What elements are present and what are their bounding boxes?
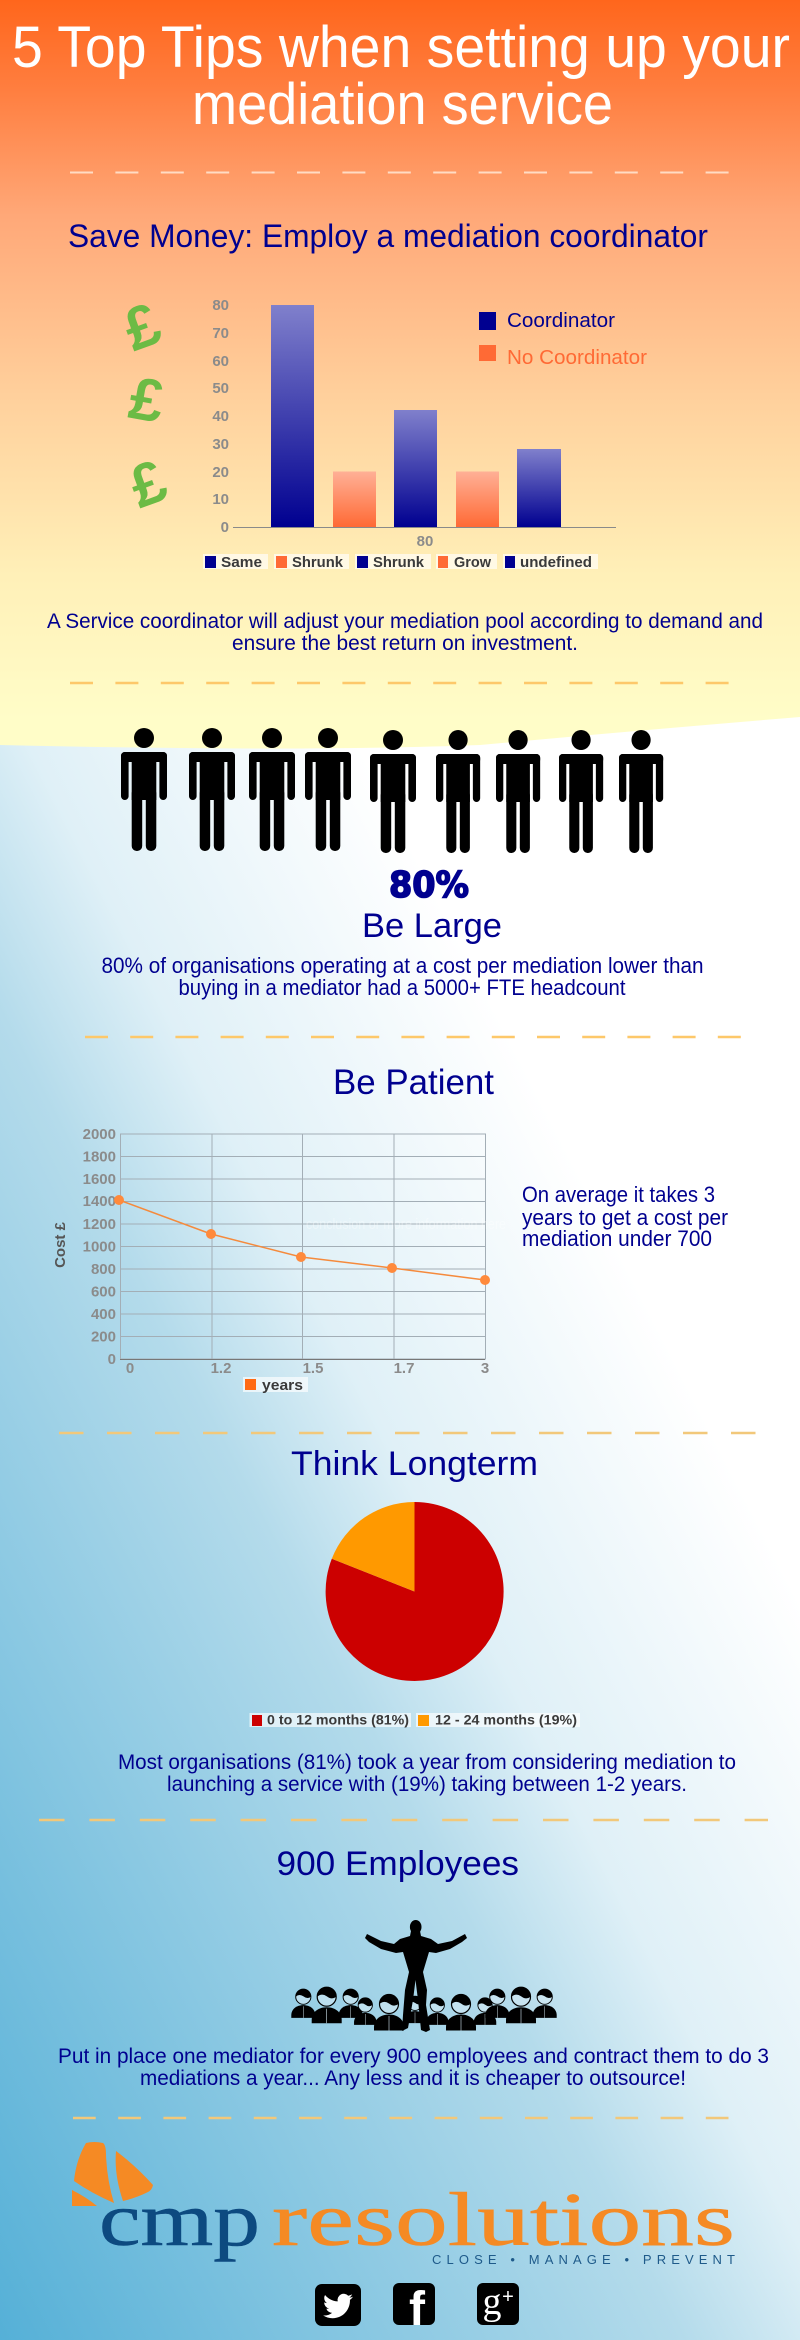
chart legend: undefined: [520, 554, 592, 571]
chart legend: Shrunk: [292, 554, 344, 571]
bar chart: 30: [212, 436, 229, 453]
text: put in place: mediations a year... Any less and it is cheaper to outsource!: [140, 2067, 686, 2090]
stat: 80%: 80%: [389, 865, 469, 906]
section: be large: [102, 728, 704, 1000]
icon: facebook: f: [409, 2283, 426, 2336]
heading: be patient: Be Patient: [333, 1063, 494, 1102]
text: service coordinator: A Service coordinator will adjust your mediation pool according to demand and: [47, 610, 763, 633]
bar chart: 40: [212, 408, 229, 425]
line chart: [52, 1126, 506, 1394]
logo: cmp resolutions: [72, 2142, 735, 2267]
line chart: 1.2: [211, 1360, 231, 1377]
icon: google plus: [477, 2281, 519, 2325]
line chart: 0: [126, 1360, 134, 1377]
text: on average: [522, 1182, 728, 1251]
chart key: coordinator: No Coordinator: [507, 347, 647, 369]
icon: logo petals: [72, 2142, 153, 2206]
line chart: Cost £: [52, 1221, 69, 1268]
line chart: years: [262, 1377, 303, 1394]
heading: be large: Be Large: [362, 907, 502, 945]
icons: green pound signs: £: [121, 447, 175, 521]
bar chart: 20: [212, 464, 229, 481]
text: on average: mediation under 700: [522, 1226, 712, 1251]
text: organisations: 80% of organisations operating at a cost per mediation lower than: [102, 953, 704, 978]
icon: google plus: +: [502, 2286, 514, 2308]
section: save money: [47, 218, 763, 655]
logo: cmp resolutions: cmp: [99, 2178, 260, 2262]
heading: think longterm: Think Longterm: [291, 1445, 538, 1483]
chart legend: [203, 554, 598, 571]
line chart: 1800: [83, 1148, 116, 1166]
line chart: 1.7: [394, 1360, 414, 1377]
pie legend: 12 - 24 months (19%): [435, 1712, 577, 1728]
title: [12, 15, 790, 137]
pie chart: [326, 1502, 504, 1681]
pie legend: 0 to 12 months (81%): [267, 1712, 409, 1728]
text: organisations: [102, 953, 704, 1000]
line chart: 3: [481, 1360, 489, 1377]
bar chart: 60: [212, 353, 229, 370]
text: on average: On average it takes 3: [522, 1182, 715, 1207]
heading: 900 employees: 900 Employees: [276, 1845, 519, 1883]
icons: green pound signs: £: [124, 364, 169, 436]
line chart: 400: [91, 1306, 116, 1323]
heading: save money: Save Money: Employ a mediation coordinator: [68, 218, 708, 254]
text: on average: years to get a cost per: [522, 1205, 728, 1230]
line chart: 1600: [83, 1171, 116, 1188]
chart legend: Shrunk: [373, 554, 425, 571]
icons: row of nine people: [121, 728, 663, 853]
icons: green pound signs: [115, 290, 175, 521]
line chart: 1200: [83, 1216, 116, 1233]
icon: facebook: [393, 2283, 435, 2336]
line chart: conclusion or more information here: [306, 1216, 506, 1233]
text: service coordinator: ensure the best return on investment.: [232, 632, 578, 655]
line chart: 1.5: [303, 1360, 323, 1377]
section: be patient: [52, 1063, 728, 1394]
text: service coordinator: [47, 610, 763, 655]
bar chart: 70: [212, 325, 229, 342]
text: put in place: Put in place one mediator for every 900 employees and contract them to do 3: [58, 2045, 769, 2068]
text: most organisations: launching a service with (19%) taking between 1-2 years.: [167, 1773, 687, 1796]
bar chart: 0: [221, 519, 229, 536]
text: most organisations: [118, 1751, 736, 1796]
line chart: 800: [91, 1261, 116, 1278]
background: orange to yellow upper panel: [0, 0, 800, 748]
line chart: 0: [108, 1351, 116, 1368]
bar chart: 10: [212, 491, 229, 508]
bar chart: [212, 297, 616, 550]
section: think longterm: [118, 1445, 736, 1796]
line chart: 200: [91, 1328, 116, 1346]
chart key: coordinator: Coordinator: [507, 310, 615, 332]
logo: cmp resolutions: CLOSE • MANAGE • PREVENT: [432, 2252, 735, 2267]
text: most organisations: Most organisations (81%) took a year from considering mediation to: [118, 1751, 736, 1774]
social icons: [315, 2281, 519, 2336]
title: mediation service: [192, 72, 613, 137]
chart legend: Same: [221, 554, 262, 571]
line chart: 1000: [83, 1238, 116, 1256]
line chart: 600: [91, 1284, 116, 1300]
text: organisations: buying in a mediator had a 5000+ FTE headcount: [178, 975, 626, 1000]
bar chart: 80: [212, 297, 229, 314]
icon: crowd of employees: [291, 1987, 557, 2030]
bar chart: 80: [417, 533, 433, 550]
line chart: 1400: [83, 1193, 116, 1210]
chart key: coordinator: [479, 310, 647, 369]
pie legend: [250, 1712, 580, 1728]
icon: standing mediator silhouette: [365, 1920, 467, 2032]
icons: green pound signs: £: [115, 290, 169, 364]
section: 900 employees: [58, 1845, 769, 2090]
bar chart: 50: [212, 380, 229, 397]
logo: cmp resolutions: resolutions: [272, 2178, 735, 2262]
icon: twitter: [315, 2284, 361, 2326]
icon: google plus: g: [482, 2281, 502, 2323]
text: put in place: [58, 2045, 769, 2090]
line chart: 2000: [83, 1126, 116, 1143]
chart legend: Grow: [454, 554, 491, 571]
